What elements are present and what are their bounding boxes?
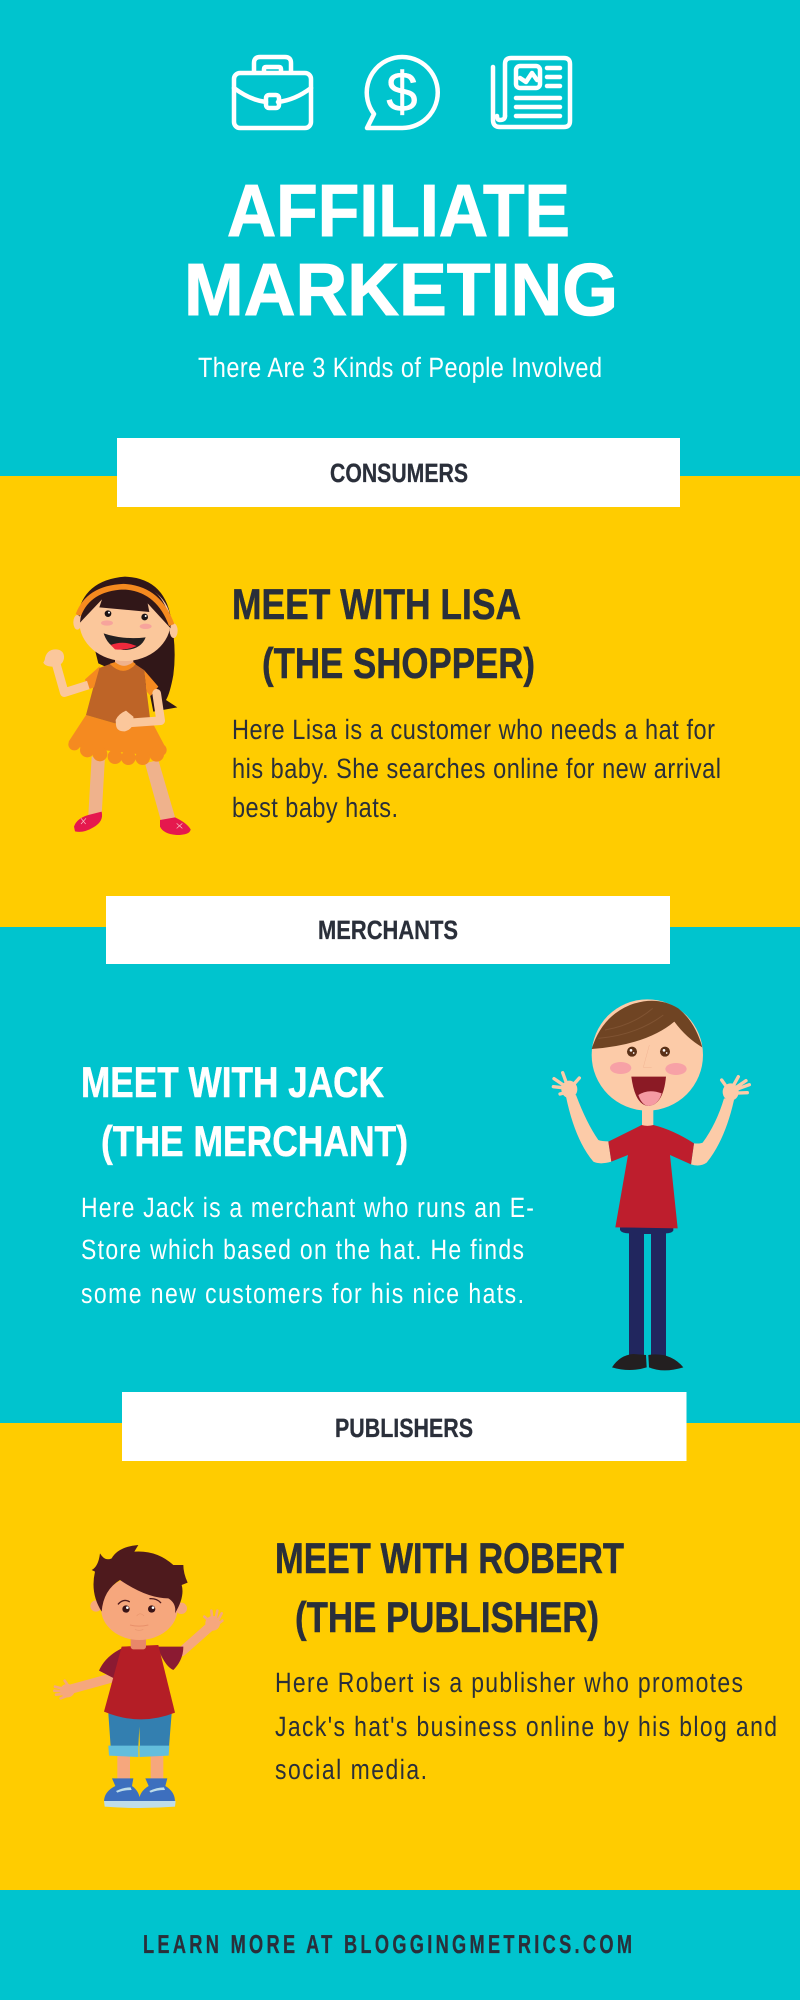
subtitle: There Are 3 Kinds of People Involved bbox=[198, 352, 602, 383]
footer call to action: LEARN MORE AT BLOGGINGMETRICS.COM bbox=[143, 1929, 632, 1959]
body text: Jack: Here Jack is a merchant who runs an E- bbox=[81, 1192, 534, 1223]
label bar: merchants bbox=[106, 896, 670, 964]
heading: meet Jack: MEET WITH JACK bbox=[81, 1059, 384, 1107]
body text: Robert: social media. bbox=[275, 1754, 427, 1785]
illustration: Jack bbox=[553, 999, 749, 1370]
heading: meet Lisa bbox=[232, 581, 535, 688]
icon: newspaper bbox=[493, 58, 570, 127]
body text: Robert: Jack's hat's business online by his blog and bbox=[275, 1711, 777, 1742]
panel: publishers bbox=[0, 1392, 800, 1891]
body text: Lisa: Here Lisa is a customer who needs a hat for bbox=[232, 714, 715, 745]
label bar: merchants: MERCHANTS bbox=[318, 915, 458, 945]
body text: Lisa: best baby hats. bbox=[232, 792, 398, 823]
label bar: consumers: CONSUMERS bbox=[330, 458, 468, 488]
body text: Lisa: his baby. She searches online for new arrival bbox=[232, 753, 721, 784]
label bar: publishers: PUBLISHERS bbox=[335, 1413, 473, 1443]
illustration: Lisa bbox=[43, 577, 191, 835]
title: MARKETING bbox=[184, 248, 618, 331]
label bar: publishers bbox=[122, 1392, 686, 1461]
footer panel bbox=[0, 1890, 800, 2000]
label bar: consumers bbox=[117, 438, 680, 507]
body text: Jack: Store which based on the hat. He finds bbox=[81, 1234, 524, 1265]
heading: meet Jack: (THE MERCHANT) bbox=[101, 1118, 408, 1166]
heading: meet Robert bbox=[275, 1535, 624, 1642]
heading: meet Lisa: MEET WITH LISA bbox=[232, 581, 521, 629]
panel: merchants bbox=[0, 896, 800, 1424]
icon: briefcase bbox=[234, 57, 311, 128]
heading: meet Robert: (THE PUBLISHER) bbox=[295, 1594, 599, 1642]
title: AFFILIATE bbox=[227, 169, 570, 252]
header panel bbox=[0, 0, 800, 476]
heading: meet Lisa: (THE SHOPPER) bbox=[262, 640, 535, 688]
illustration: Robert bbox=[54, 1545, 222, 1808]
body text: Jack bbox=[81, 1192, 534, 1309]
icon: dollar speech bubble bbox=[367, 57, 438, 128]
body text: Lisa bbox=[232, 714, 721, 823]
body text: Robert: Here Robert is a publisher who promotes bbox=[275, 1667, 743, 1698]
body text: Jack: some new customers for his nice hats. bbox=[81, 1278, 524, 1309]
title bbox=[184, 169, 618, 331]
icon: dollar speech bubble: $ bbox=[386, 60, 418, 123]
panel: consumers bbox=[0, 438, 800, 927]
body text: Robert bbox=[275, 1667, 777, 1785]
heading: meet Robert: MEET WITH ROBERT bbox=[275, 1535, 624, 1583]
heading: meet Jack bbox=[81, 1059, 408, 1166]
